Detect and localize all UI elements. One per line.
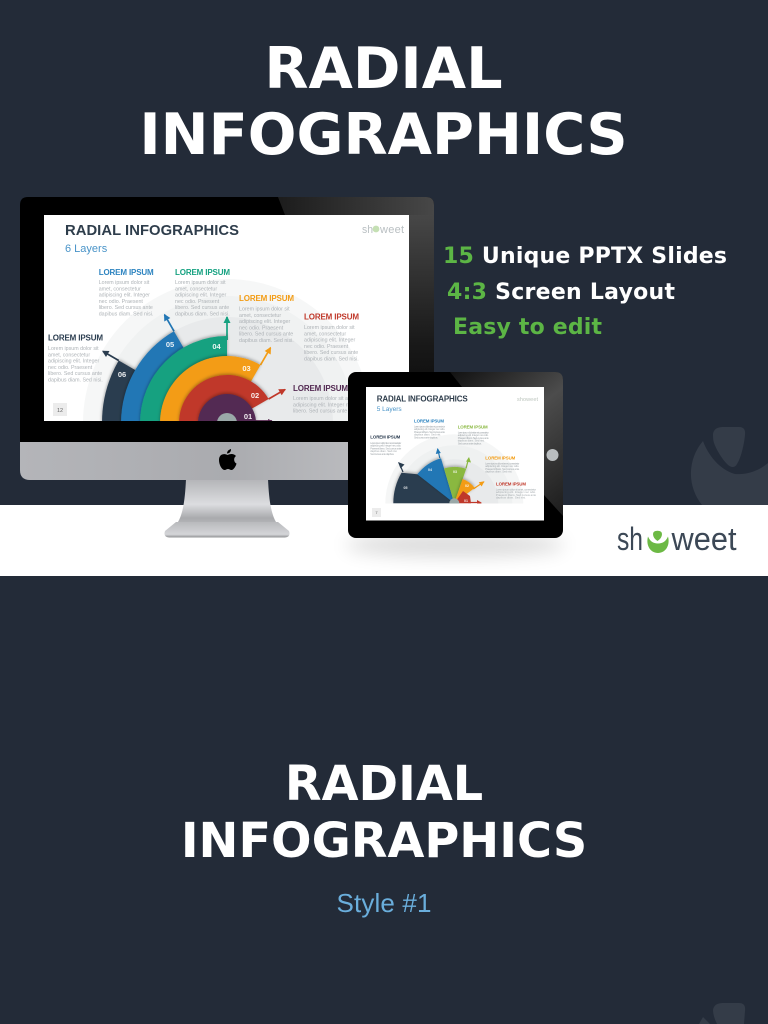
label: dark: dapibus diam. Sed nisi. — [370, 449, 398, 453]
label: blue: Praesent libero. Sed cursus ante — [414, 430, 446, 434]
layer 02 — [179, 375, 286, 423]
title: INFOGRAPHICS — [139, 101, 628, 168]
layer numbers: 06 — [118, 370, 126, 379]
label: orange — [239, 294, 294, 344]
chart hub — [449, 498, 460, 504]
label: green: LOREM IPSUM — [175, 268, 230, 277]
label: orange: LOREM IPSUM — [239, 294, 294, 303]
label: blue: dapibus diam. Sed nisi. — [99, 312, 153, 318]
label: blue: dapibus diam. Sed nisi. — [414, 433, 441, 437]
layer 04 — [417, 448, 454, 503]
slide number — [372, 508, 381, 517]
icon: apple logo — [219, 449, 236, 470]
slide subtitle: 5 Layers — [377, 406, 402, 413]
label: dark: libero. Sed cursus ante — [48, 371, 102, 377]
section subtitle: Style #1 — [336, 888, 432, 918]
section title: RADIAL — [285, 757, 483, 812]
label: red: dapibus diam. Sed nisi. — [304, 356, 359, 362]
label: orange: dapibus diam. Sed nisi. — [239, 338, 294, 344]
label: purple — [293, 385, 348, 412]
showeet logo: weet — [671, 521, 737, 557]
layer 05 — [393, 462, 454, 503]
label: dark — [48, 334, 103, 384]
title: RADIAL — [264, 35, 503, 102]
label: red: Praesent libero. Sed cursus ante — [496, 493, 536, 497]
label: red: amet, consectetur — [304, 331, 346, 337]
label: red: Lorem ipsum dolor sit — [304, 325, 355, 331]
label: orange: adipiscing elit. Integer — [239, 319, 290, 325]
label: blue: nec odio. Praesent — [99, 299, 143, 305]
label: orange: Lorem ipsum dolor sit — [239, 306, 290, 312]
label: green: adipiscing elit. Integer — [175, 293, 226, 299]
layer numbers: 02 — [465, 484, 469, 488]
section title: INFOGRAPHICS — [181, 814, 587, 869]
feature list — [443, 244, 727, 340]
label: blue: LOREM IPSUM — [414, 418, 444, 424]
label: dark: Lorem ipsum dolor sit — [48, 346, 99, 352]
label: green: nec odio. Praesent — [175, 299, 220, 305]
label: dark: Lorem ipsum dolor sit amet, consectetur — [370, 441, 401, 445]
monitor gloss: top — [278, 197, 434, 215]
label: green — [175, 268, 230, 318]
layer numbers: 05 — [166, 340, 174, 349]
label: green: amet, consectetur — [175, 286, 217, 292]
label: dark — [370, 434, 402, 456]
layer 03 — [444, 457, 471, 503]
label: blue: amet, consectetur — [99, 286, 141, 292]
label: red: Lorem ipsum dolor sit amet, consectetur — [496, 488, 536, 492]
radial chart: 6 layers — [102, 314, 286, 433]
label: orange: Lorem ipsum dolor sit amet, consectetur — [485, 462, 519, 466]
layer numbers: 04 — [212, 342, 221, 351]
chart hub — [217, 413, 237, 421]
label: red: libero. Sed cursus ante — [304, 350, 358, 356]
label: dark: Sed cursus ante dapibus. — [370, 452, 395, 456]
layer numbers: 03 — [242, 364, 251, 373]
slide heading: RADIAL INFOGRAPHICS — [377, 394, 468, 404]
label: dark: adipiscing elit. Integer nec odio. — [370, 444, 402, 448]
label: orange: adipiscing elit. Integer nec odio. — [485, 464, 520, 468]
slide subtitle: 6 Layers — [65, 243, 108, 255]
label: purple: Lorem ipsum dolor sit amet — [293, 396, 357, 402]
label: green — [458, 424, 489, 445]
layer numbers: 05 — [404, 486, 408, 490]
label: red: dapibus diam. Sed nisi. — [496, 496, 526, 500]
layer 01 — [457, 491, 482, 504]
title — [139, 35, 628, 168]
label: orange: libero. Sed cursus ante — [239, 332, 293, 338]
layer 05 — [120, 314, 186, 421]
layer numbers: 02 — [251, 391, 259, 400]
label: green: adipiscing elit. Integer nec odio. — [458, 433, 489, 437]
label: dark: nec odio. Praesent — [48, 365, 93, 371]
label: red — [496, 482, 536, 500]
layer 06 — [100, 350, 136, 421]
label: orange: amet, consectetur — [239, 313, 281, 319]
label: green: LOREM IPSUM — [458, 424, 488, 430]
white footer band — [0, 505, 768, 576]
label: dark: LOREM IPSUM — [48, 334, 103, 342]
layer 03 — [160, 347, 271, 423]
monitor — [20, 197, 434, 480]
section title — [181, 757, 587, 869]
label: orange — [485, 456, 520, 474]
feature list: 4:3 Screen Layout — [447, 280, 675, 305]
label: purple: LOREM IPSUM — [293, 384, 348, 393]
background rings — [83, 279, 362, 421]
slide number: 12 — [57, 408, 63, 414]
label: green: libero. Sed cursus ante — [175, 305, 229, 311]
radial chart: 5 layers — [393, 448, 484, 508]
slide logo: weet — [379, 224, 404, 236]
showeet logo: sh — [617, 521, 643, 557]
label: blue: Lorem ipsum dolor sit amet, consectetur — [414, 424, 445, 428]
label: orange: nec odio. Praesent — [239, 325, 284, 331]
label: red: LOREM IPSUM — [304, 312, 359, 322]
label: green: dapibus diam. Sed nisi. — [175, 312, 230, 318]
monitor screen slide — [44, 215, 409, 421]
tablet button — [546, 449, 558, 461]
slide heading: RADIAL INFOGRAPHICS — [65, 223, 239, 239]
label: orange: Praesent libero. Sed cursus ante — [485, 467, 520, 471]
label: dark: amet, consectetur — [48, 352, 90, 358]
icon: logo mark — [647, 531, 669, 553]
watermark: bottom slide logo mark — [699, 1003, 745, 1024]
label: blue — [414, 418, 446, 439]
label: red: adipiscing elit. Integer — [304, 338, 355, 344]
layer numbers: 03 — [453, 470, 457, 474]
label: purple: adipiscing elit. Integer nec — [293, 402, 355, 408]
tablet body — [348, 372, 563, 538]
label: red: adipiscing elit. Integer nec odio. — [496, 490, 536, 494]
label: blue: adipiscing elit. Integer — [99, 293, 150, 299]
monitor chin — [20, 442, 434, 480]
layer 04 — [140, 316, 230, 423]
layer numbers: 04 — [428, 468, 432, 472]
label: blue: Lorem ipsum dolor sit — [99, 280, 150, 286]
label: blue: Sed cursus ante dapibus. — [414, 435, 438, 439]
slide number: 7 — [375, 510, 378, 515]
tablet gloss — [450, 372, 563, 516]
label: blue: LOREM IPSUM — [99, 268, 154, 277]
label: green: Lorem ipsum dolor sit amet, consectetur — [458, 430, 489, 434]
label: orange: dapibus diam. Sed nisi. — [485, 470, 513, 474]
monitor body — [20, 197, 434, 442]
label: red: LOREM IPSUM — [496, 482, 526, 486]
monitor gloss: side — [409, 215, 434, 442]
watermark: top slide logo mark — [691, 427, 768, 505]
background rings — [386, 434, 523, 504]
tablet shadow — [345, 533, 565, 557]
label: dark: adipiscing elit. Integer — [48, 359, 99, 365]
label: blue: libero. Sed cursus ante — [99, 305, 153, 311]
monitor stand — [164, 479, 290, 538]
label: orange: LOREM IPSUM — [485, 456, 516, 460]
slide logo: showeet — [517, 397, 538, 403]
slide logo — [362, 225, 404, 233]
label: dark: dapibus diam. Sed nisi. — [48, 378, 103, 384]
label: blue — [99, 268, 154, 318]
label: purple: libero. Sed cursus ante — [293, 409, 347, 415]
layer numbers — [118, 340, 259, 421]
layer numbers — [404, 468, 469, 503]
label: green: Praesent libero. Sed cursus ante — [458, 436, 489, 440]
label: dark: Praesent libero. Sed cursus ante — [370, 446, 402, 450]
label: red — [304, 312, 359, 362]
slide logo: sh — [362, 224, 373, 236]
tablet screen slide — [366, 387, 544, 520]
label: green: Lorem ipsum dolor sit — [175, 280, 226, 286]
layer numbers: 01 — [464, 499, 468, 503]
feature list: Easy to edit — [453, 315, 602, 340]
feature list: 15 Unique PPTX Slides — [443, 244, 727, 269]
layer numbers: 01 — [244, 412, 252, 421]
label: blue: adipiscing elit. Integer nec odio. — [414, 427, 445, 431]
layer 01 — [198, 394, 275, 425]
label: dark: LOREM IPSUM — [370, 434, 401, 440]
label: green: Sed cursus ante dapibus. — [458, 441, 482, 445]
showeet logo — [617, 521, 737, 557]
slide number — [53, 403, 67, 416]
label: red: nec odio. Praesent — [304, 344, 349, 350]
label: green: dapibus diam. Sed nisi. — [458, 439, 485, 443]
tablet — [348, 372, 563, 538]
layer 02 — [454, 479, 484, 503]
